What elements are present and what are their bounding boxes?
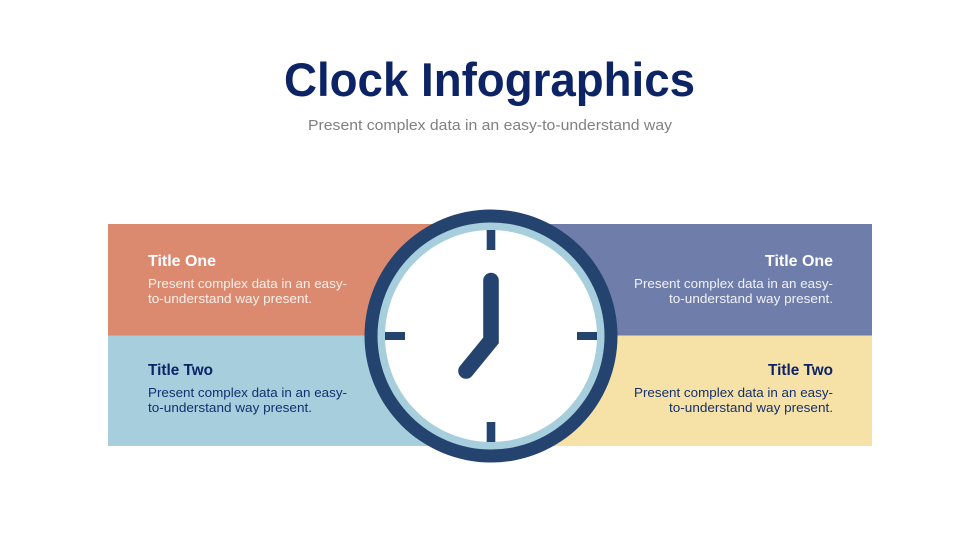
panel: bottom right	[490, 336, 872, 446]
text block: bottom right	[634, 386, 833, 415]
text block: bottom left: to-understand way present.	[148, 401, 312, 415]
text block: top left: Present complex data in an easy-	[148, 277, 347, 291]
text block: top right: Present complex data in an easy-	[634, 277, 833, 291]
panel: top left	[108, 224, 490, 336]
text block: bottom left: Present complex data in an easy-	[148, 386, 347, 400]
title: Clock Infographics	[284, 53, 695, 106]
text block: bottom right: Present complex data in an easy-	[634, 386, 833, 400]
clock hands	[466, 280, 491, 371]
text block: top left	[148, 277, 347, 306]
panel: top right	[490, 224, 872, 336]
text block: bottom right: to-understand way present.	[669, 401, 833, 415]
subtitle: Present complex data in an easy-to-understand way	[308, 118, 673, 134]
text block: top right	[634, 277, 833, 306]
icon: clock	[364, 210, 618, 462]
heading: top right: Title One	[765, 253, 833, 270]
text block: top right: to-understand way present.	[669, 292, 833, 306]
text block: bottom left	[148, 386, 347, 415]
heading: bottom right: Title Two	[768, 362, 833, 379]
panel: bottom left	[108, 336, 490, 446]
clock tick marks	[385, 230, 597, 442]
heading: top left: Title One	[148, 253, 216, 270]
heading: bottom left: Title Two	[148, 362, 213, 379]
text block: top left: to-understand way present.	[148, 292, 312, 306]
